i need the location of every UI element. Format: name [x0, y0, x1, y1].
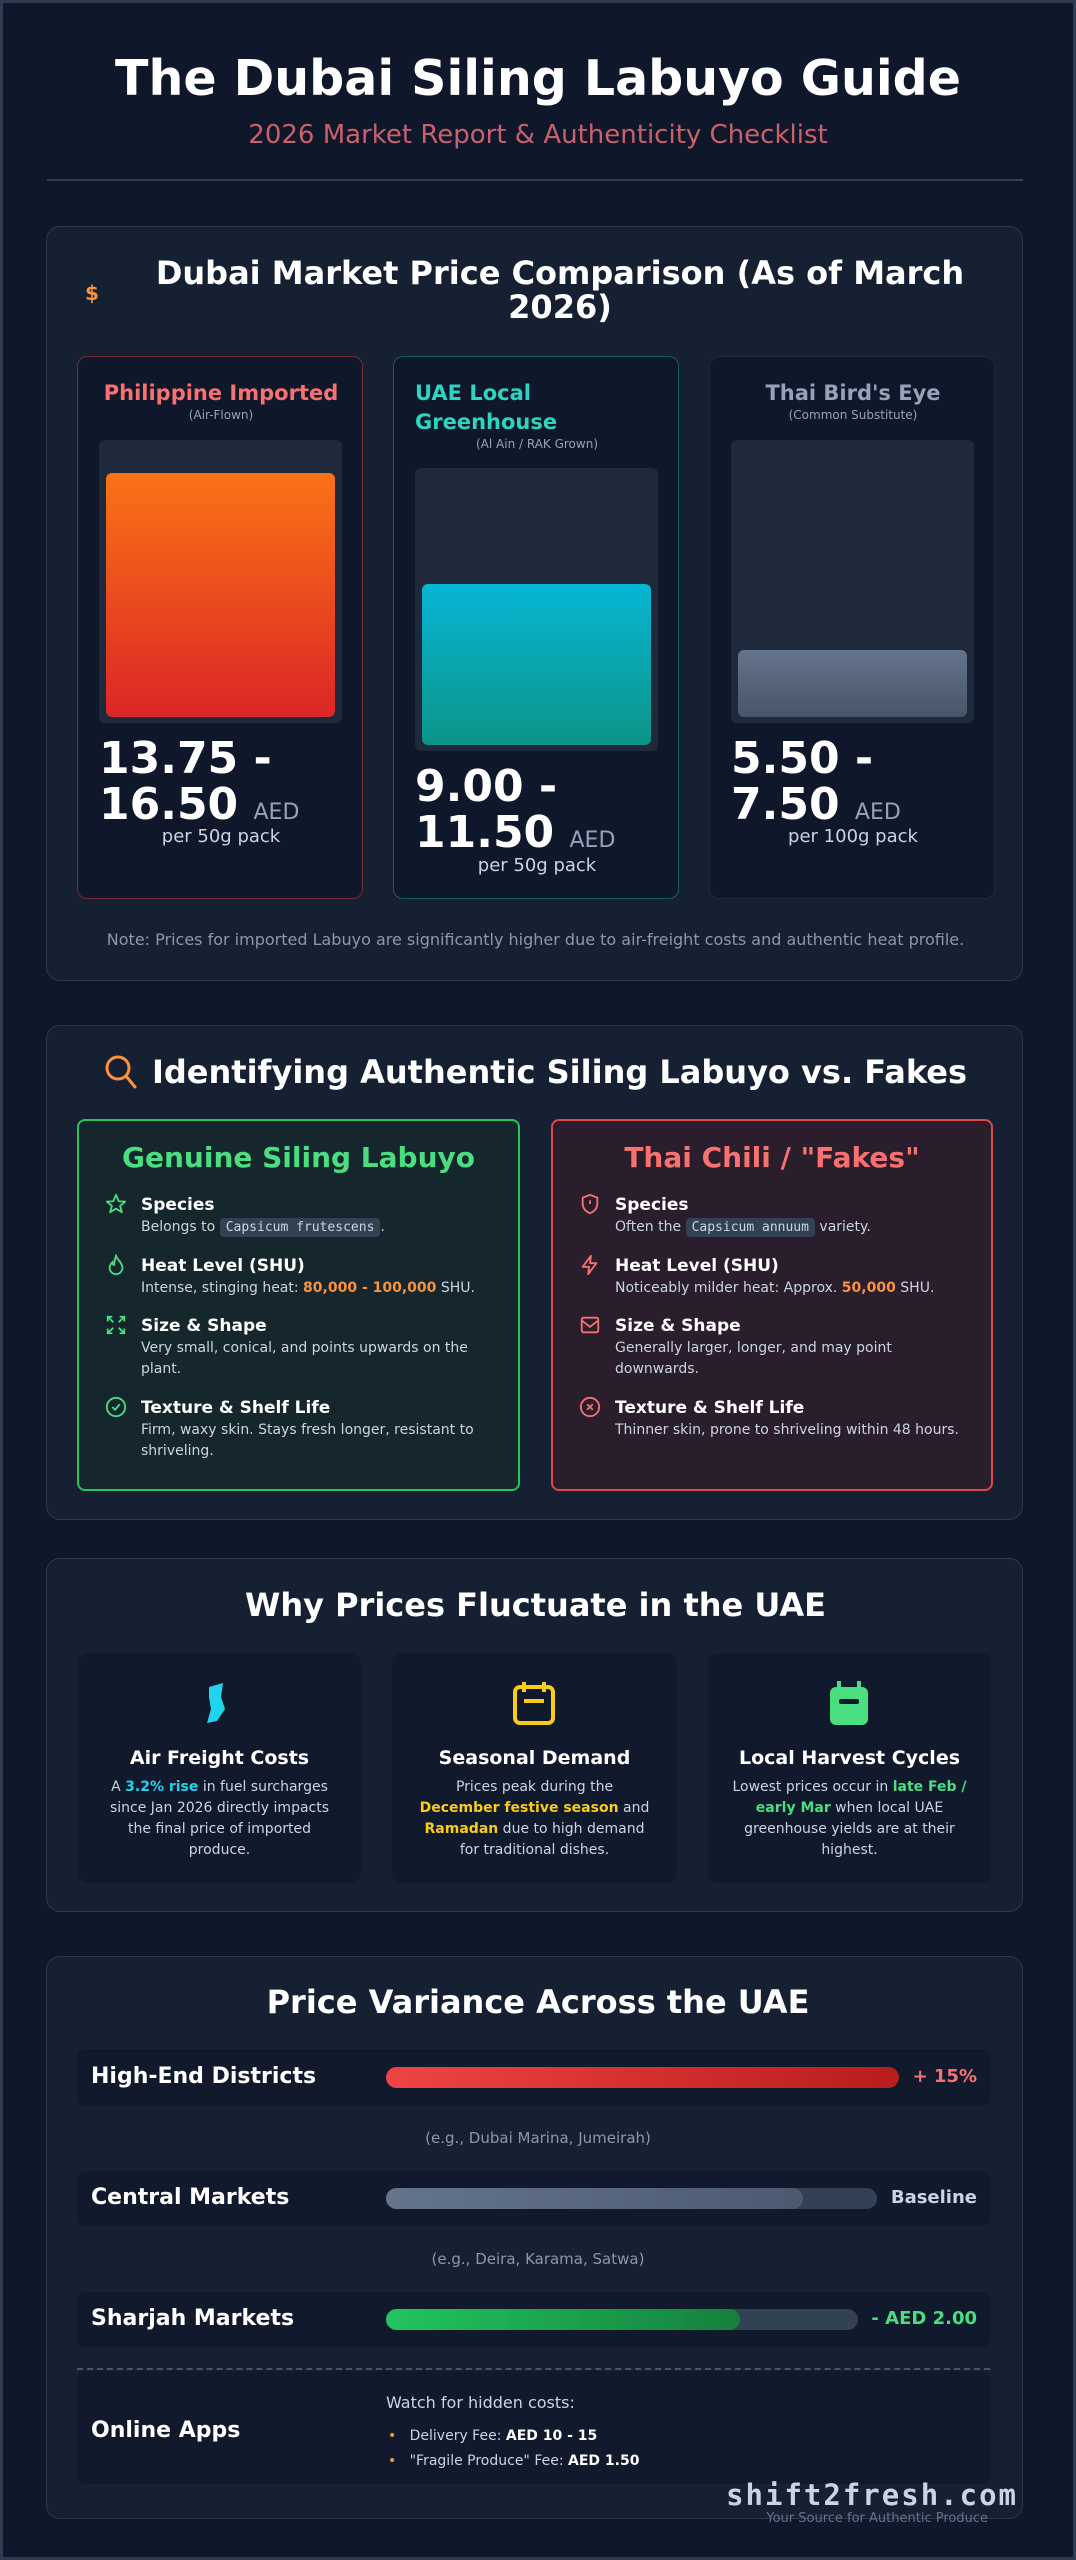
box: fakes: Often the Capsicum annuum variety. [615, 1219, 871, 1235]
subtitle: 2026 Market Report & Authenticity Checklist [248, 120, 828, 150]
row: sharjah: Sharjah Markets [91, 2306, 294, 2331]
icon: freight [207, 1683, 225, 1723]
row: high-end: High-End Districts [91, 2064, 316, 2089]
box: genuine: Texture & Shelf Life [141, 1398, 330, 1418]
card: UAE Local Greenhouse: UAE Local Greenhouse [415, 381, 557, 434]
card: Philippine Imported: (Air-Flown) [189, 408, 253, 422]
card: UAE Local Greenhouse: per 50g pack [478, 855, 596, 876]
price: thai [731, 733, 901, 830]
title: The Dubai Siling Labuyo Guide [115, 50, 961, 107]
price: thai: 7.50 AED [731, 779, 901, 830]
icon: calendar filled [830, 1681, 868, 1725]
footer tagline: Your Source for Authentic Produce [766, 2511, 988, 2526]
icon: dollar: $ [85, 281, 99, 305]
price: local: 11.50 AED [415, 807, 615, 858]
price: imported: 13.75 - [99, 733, 272, 784]
heading: Why Prices Fluctuate in the UAE [245, 1586, 826, 1624]
row: online apps: • Delivery Fee: AED 10 - 15 [388, 2428, 597, 2444]
card: seasonal: Prices peak during the [456, 1779, 613, 1795]
card: UAE Local Greenhouse [393, 356, 679, 899]
item: heat [108, 1254, 475, 1296]
box: genuine: Size & Shape [141, 1316, 267, 1336]
row: high-end [77, 2049, 990, 2106]
panel: authenticity [46, 1025, 1023, 1520]
card: seasonal [392, 1653, 677, 1883]
card: Thai Bird's Eye: per 100g pack [788, 826, 918, 847]
price: imported [99, 733, 299, 830]
card: harvest: Lowest prices occur in late Feb / early Mar when local UAE greenhouse yields are at their highest. [732, 1779, 967, 1858]
box: genuine [77, 1119, 520, 1491]
item: heat [582, 1254, 934, 1296]
card: Thai Bird's Eye: (Common Substitute) [789, 408, 917, 422]
box: fakes [551, 1119, 993, 1491]
caption: high-end: (e.g., Dubai Marina, Jumeirah) [425, 2129, 651, 2147]
price: local [415, 761, 615, 858]
box: genuine: Species [141, 1195, 214, 1215]
bar: thai [731, 440, 974, 723]
card: seasonal: December festive season and Ramadan due to high demand for traditional dishes. [420, 1800, 649, 1858]
box: genuine: Heat Level (SHU) [141, 1256, 305, 1276]
icon: calendar outline [513, 1682, 555, 1725]
box: fakes: Generally larger, longer, and may point downwards. [615, 1340, 892, 1377]
card: Philippine Imported [77, 356, 363, 899]
card: Thai Bird's Eye: Thai Bird's Eye [765, 381, 941, 405]
heading: identifying: Identifying Authentic Siling Labuyo vs. Fakes [152, 1053, 967, 1091]
bar: imported [99, 440, 342, 723]
row: central [77, 2171, 990, 2226]
row: online apps [77, 2371, 990, 2484]
item: size [106, 1316, 468, 1377]
item: texture [580, 1396, 959, 1438]
card: UAE Local Greenhouse: (Al Ain / RAK Grown) [476, 437, 598, 451]
box: genuine: Belongs to Capsicum frutescens . [141, 1219, 385, 1235]
row: sharjah: - AED 2.00 [871, 2308, 977, 2329]
box: fakes: Texture & Shelf Life [615, 1398, 804, 1418]
card: Philippine Imported: per 50g pack [162, 826, 280, 847]
box: genuine: Very small, conical, and points upwards on the plant. [141, 1340, 468, 1377]
row: online apps: Watch for hidden costs: [386, 2393, 575, 2412]
bar: local [415, 468, 658, 751]
row: sharjah [77, 2292, 990, 2347]
item: species [582, 1194, 871, 1237]
box: fakes: Noticeably milder heat: Approx. 50,000 SHU. [615, 1280, 934, 1296]
card: air freight: A 3.2% rise in fuel surcharges since Jan 2026 directly impacts the final price of imported produce. [110, 1779, 329, 1858]
footer brand: shift2fresh.com [726, 2478, 1018, 2512]
item: texture [106, 1396, 474, 1459]
price: imported: 16.50 AED [99, 779, 299, 830]
box: genuine: Genuine Siling Labuyo [122, 1141, 475, 1174]
row: online apps: • "Fragile Produce" Fee: AED 1.50 [388, 2453, 639, 2469]
item: species [106, 1194, 385, 1237]
price: local: 9.00 - [415, 761, 557, 812]
box: genuine: Intense, stinging heat: 80,000 - 100,000 SHU. [141, 1280, 475, 1296]
panel: why prices fluctuate [46, 1558, 1023, 1912]
price: thai: 5.50 - [731, 733, 873, 784]
card: seasonal: Seasonal Demand [439, 1747, 630, 1769]
card: air freight [78, 1653, 361, 1883]
box: fakes: Size & Shape [615, 1316, 741, 1336]
card: Thai Bird's Eye [709, 356, 995, 899]
card: air freight: Air Freight Costs [130, 1747, 309, 1769]
panel: price comparison [46, 226, 1023, 981]
heading: price variance: Price Variance Across the UAE [267, 1983, 809, 2021]
row: central: Baseline [891, 2187, 977, 2208]
box: fakes: Thinner skin, prone to shriveling within 48 hours. [615, 1422, 959, 1438]
caption: central: (e.g., Deira, Karama, Satwa) [432, 2250, 644, 2268]
row: high-end: + 15% [913, 2066, 977, 2087]
card: harvest [708, 1653, 991, 1883]
box: fakes: Species [615, 1195, 688, 1215]
heading: price comparison: Dubai Market Price Comparison (As of March 2026) [156, 254, 964, 326]
item: size [580, 1316, 892, 1377]
panel: price variance [46, 1956, 1023, 2519]
card: harvest: Local Harvest Cycles [739, 1747, 960, 1769]
box: fakes: Heat Level (SHU) [615, 1256, 779, 1276]
note: Note: Prices for imported Labuyo are significantly higher due to air-freight costs and authentic heat profile. [107, 930, 964, 949]
row: online apps: Online Apps [91, 2418, 240, 2443]
box: genuine: Firm, waxy skin. Stays fresh longer, resistant to shriveling. [141, 1422, 474, 1459]
card: Philippine Imported: Philippine Imported [104, 381, 338, 405]
box: fakes: Thai Chili / "Fakes" [624, 1141, 920, 1174]
row: central: Central Markets [91, 2185, 289, 2210]
